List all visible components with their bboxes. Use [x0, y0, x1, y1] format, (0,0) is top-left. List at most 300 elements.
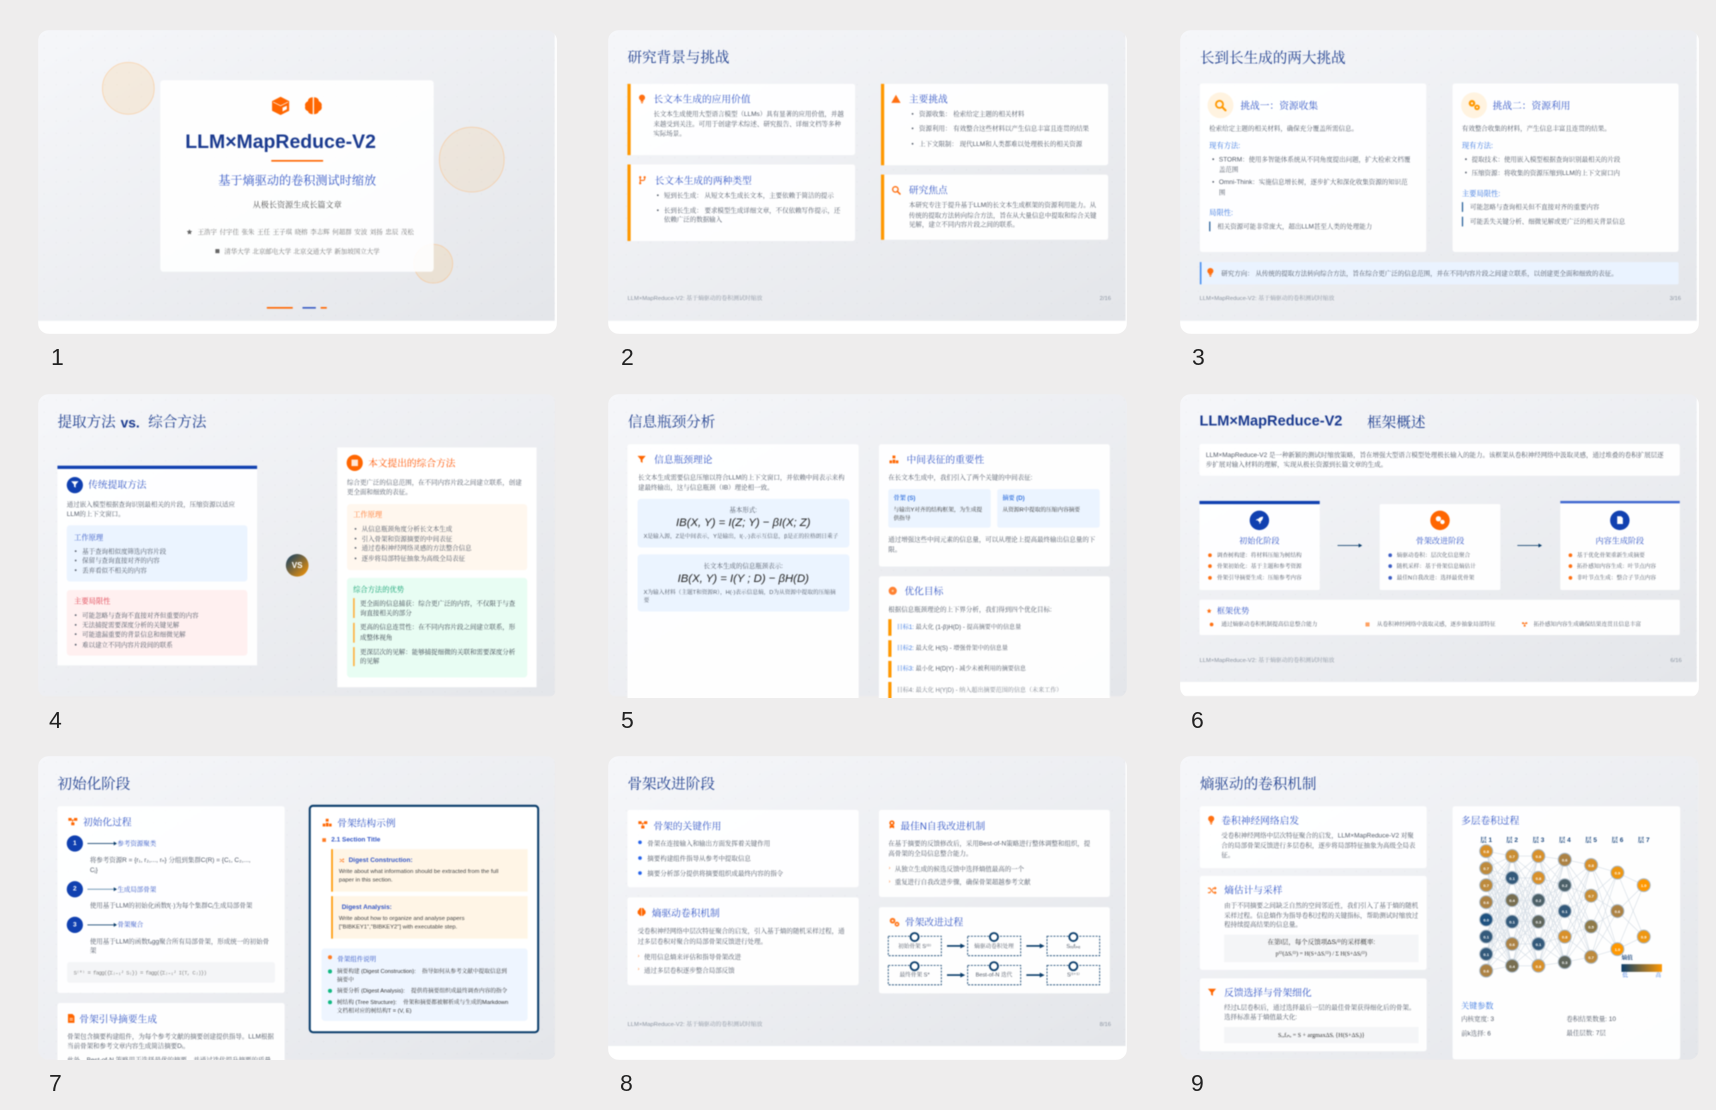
authors: 王浩宇 付宇佳 张朱 王任 王子琪 晓榕 李志辉 何超群 安波 刘扬 忠辰 茂松 — [198, 227, 414, 236]
slide 2: research background — [608, 30, 1127, 334]
box: component legend: 摘要构建 (Digest Construction): 指导如何从参考文献中提取信息到 — [337, 967, 507, 975]
legend: entropy scale — [1620, 953, 1662, 979]
box: skeleton — [888, 489, 991, 528]
box: advantages: 更高的信息连贯性：在不同内容片段之间建立联系，形 — [360, 622, 516, 631]
panel: initialization: 骨架引导摘要生成：压缩参考内容 — [1217, 574, 1302, 582]
decorative dashes — [267, 307, 327, 309]
box: advantages — [347, 578, 527, 678]
panel: intro: LLM×MapReduce-V2 是一种新颖的测试时缩放策略，旨在增强大型语言模型处理极长输入的能力。该框架从卷积神经网络中汲取灵感，通过堆叠的卷积扩展层逐 — [1206, 450, 1664, 459]
box: component legend: 摘要分析 (Digest Analysis): 提供将摘要组织成最终调查内容的指令 — [337, 987, 508, 995]
chart: convolution network: 层 6 — [1611, 835, 1624, 844]
formula box: long text form: IB(X, Y) = I(Y ; D) − βH(D) — [678, 573, 809, 585]
slide 4: extraction vs synthesis — [38, 394, 557, 698]
icon: branch — [639, 176, 646, 184]
panel: challenge one: 相关资源可能非常庞大，超出LLM甚至人类的处理能力 — [1217, 222, 1372, 231]
footer: LLM×MapReduce-V2: 基于熵驱动的卷积测试时缩放 — [627, 1020, 763, 1028]
chart: convolution network: 层 2 — [1506, 835, 1518, 844]
chart: convolution network: 0.4 — [1509, 898, 1516, 903]
chart: convolution network: 0.8 — [1588, 863, 1595, 868]
box: limitations: 难以建立不同内容片段间的联系 — [82, 640, 173, 649]
legend: entropy scale: 熵值 — [1620, 953, 1633, 961]
chart: convolution network — [1480, 835, 1650, 977]
icon: sitemap — [323, 819, 332, 826]
panel: content generation: 拓扑感知内容生成：叶节点内容 — [1577, 562, 1656, 570]
panel: intermediate representations: 限。 — [888, 544, 901, 553]
panel: entropy convolution: 通过多层卷积逐步整合局部反馈 — [644, 966, 735, 975]
panel: digest generation: 骨架包含摘要构建组件，为每个参考文献的摘要创建提供指导。LLM根据 — [67, 1032, 274, 1041]
icon: search — [893, 187, 900, 194]
footer: LLM×MapReduce-V2: 基于熵驱动的卷积测试时缩放 — [627, 294, 763, 302]
panel: two types: 长到长生成： 要求模型生成详细文章，不仅依赖写作提示，还 — [664, 206, 841, 215]
panel: challenge one: 围 — [1219, 187, 1226, 196]
step 1 — [67, 835, 251, 874]
panel: optimization goals: 目标4: 最大化 H(Y|D) - 纳入超出摘要范围的信息（未来工作） — [897, 686, 1062, 694]
chart: convolution network: 0.6 — [1562, 858, 1568, 863]
panel: best-of-N: 高骨架的全局信息整合能力。 — [888, 848, 972, 857]
formula box: basic form: 基本形式: — [729, 505, 757, 514]
panel: digest generation: 骨架引导摘要生成 — [79, 1013, 157, 1026]
step 2 — [67, 881, 253, 909]
page number 5: 5 — [621, 707, 634, 733]
heading: 初始化阶段 — [57, 776, 131, 793]
panel: entropy sampling: 采样过程。信息熵作为指导卷积过程的关键指标，帮助测试时缩放过 — [1224, 910, 1419, 919]
panel: IB theory: 建最终输出，这与信息瓶颈（IB）理论相一致。 — [638, 482, 773, 491]
panel: refinement: 骨架改进阶段 — [1416, 535, 1464, 545]
chart: convolution network: 0.2 — [1536, 898, 1542, 903]
VS badge: VS — [292, 561, 303, 570]
heading — [57, 413, 206, 429]
formula box: long text form: 长文本生成的信息瓶颈表示: — [704, 561, 783, 570]
chart: convolution network: 1.0 — [1641, 883, 1647, 888]
box: limitations: 可能忽略与查询不直接对齐但重要的内容 — [82, 610, 199, 619]
page number 1: 1 — [51, 344, 64, 370]
slide 7: initialization stage — [38, 756, 555, 1068]
panel: digest generation — [57, 1003, 285, 1068]
chart: convolution network: 0.4 — [1509, 964, 1516, 969]
icon: orange circle — [347, 455, 363, 471]
panel: optimization goals: 根据信息瓶颈理论的上下界分析，我们得到四个优化目标: — [888, 605, 1052, 614]
panel: intro — [1199, 444, 1680, 476]
step 1: 参考资源聚类 — [117, 838, 157, 847]
panel: best-of-N — [879, 810, 1110, 897]
panel: optimization goals: 优化目标 — [904, 584, 944, 597]
page number 6: 6 — [1191, 707, 1204, 733]
box: advantages: 综合方法的优势 — [353, 585, 404, 594]
panel: two types — [627, 164, 855, 241]
footer: 3/16 — [1670, 296, 1681, 302]
panel: CNN inspiration — [1200, 806, 1427, 868]
panel: challenge one: 检索给定主题的相关材料，确保充分覆盖所需信息。 — [1209, 124, 1358, 133]
icon: shuffle — [1208, 887, 1216, 894]
chart: convolution network: 层 7 — [1638, 835, 1650, 844]
icon: target — [889, 587, 897, 595]
panel: challenge two: 可能丢失关键分析、细微见解或更广泛的相关背景信息 — [1470, 216, 1626, 225]
panel: skeleton role: 骨架的关键作用 — [653, 819, 721, 832]
heading: LLM×MapReduce-V2 — [1199, 414, 1342, 430]
step 3: 使用基于LLM的函数fₐgg聚合所有局部骨架，形成统一的初始骨 — [90, 936, 270, 945]
chart: convolution network: 0.7 — [1483, 883, 1490, 888]
box: advantages: 更深层次的见解：能够捕捉细微的关联和需要深度分析 — [360, 647, 516, 656]
panel: feedback selection — [1200, 978, 1427, 1051]
panel: best-of-N: › — [889, 879, 891, 885]
chart: convolution network: 0.1 — [1509, 920, 1516, 925]
box: principle: 工作原理 — [353, 510, 383, 519]
panel: research focus: 传统的提取方法转向综合方法，旨在从大量信息中提取和综合关键 — [909, 210, 1097, 219]
panel: feedback selection: 选择标准基于熵值最大化: — [1224, 1012, 1297, 1021]
icon: search circle — [1208, 92, 1233, 118]
panel: entropy convolution — [627, 897, 859, 985]
panel: main challenges: 主要挑战 — [909, 93, 948, 106]
key parameters: 卷积结果数量: 10 — [1566, 1014, 1616, 1023]
icon: warning — [891, 95, 901, 103]
box: principle: 逐步将局部特征抽象为高级全局表征 — [362, 554, 466, 563]
chart: convolution network: 0.6 — [1615, 909, 1621, 914]
panel: intermediate representations: 在长文本生成中，我们引入了两个关键的中间表征: — [888, 473, 1033, 482]
panel: entropy convolution: › — [638, 954, 640, 960]
box: digest: 摘要 (D) — [1002, 494, 1025, 502]
box: component legend: 摘要中 — [337, 976, 354, 984]
panel: intermediate representations: 通过增强这些中间元素的信息量，可以从理论上提高最终输出信息量的下 — [888, 534, 1096, 543]
panel: proposed synthesis — [337, 447, 537, 687]
legend: entropy scale: 高 — [1655, 971, 1661, 979]
panel: research focus: 见解，建立不同内容片段之间的联系。 — [909, 220, 1019, 229]
chart: convolution network: 0.1 — [1483, 952, 1490, 957]
panel: initialization process — [57, 806, 285, 993]
panel: advantages: 从卷积神经网络中汲取灵感，逐步抽象局部特征 — [1377, 620, 1496, 628]
box: working principle: 工作原理 — [74, 533, 104, 542]
icon: bulb — [639, 95, 645, 103]
panel: refinement: 随机采样：基于骨架信息熵估计 — [1397, 562, 1476, 570]
formula box — [1224, 935, 1419, 962]
chart: convolution network: 0.5 — [1588, 924, 1595, 929]
panel: entropy convolution: 熵驱动卷积机制 — [652, 906, 720, 919]
footer: 6/16 — [1670, 658, 1682, 664]
box: principle: 引入骨架和资源摘要的中间表征 — [362, 534, 453, 543]
panel: refinement — [1380, 504, 1500, 590]
chart: convolution network: 0.1 — [1562, 909, 1568, 914]
box: working principle: 丢弃看似不相关的内容 — [82, 565, 147, 574]
panel: proposed synthesis: 综合更广泛的信息范围，在不同内容片段之间建立联系，创建 — [347, 478, 522, 487]
panel: refinement process diagram: Best-of-N 迭代 — [976, 970, 1013, 978]
box: component legend: 骨架组件说明 — [337, 954, 377, 963]
panel: intermediate representations: 中间表征的重要性 — [906, 453, 985, 466]
panel: entropy sampling: 程持续提高结果的信息量。 — [1224, 919, 1302, 928]
affiliations: 清华大学 北京邮电大学 北京交通大学 新加坡国立大学 — [224, 246, 380, 255]
panel: advantages: 拓扑感知内容生成确保结果连贯且信息丰富 — [1534, 620, 1641, 628]
panel: challenge one: 挑战一：资源收集 — [1240, 99, 1318, 112]
formula box — [1224, 1027, 1419, 1043]
panel: refinement process diagram: 骨架改进过程 — [905, 916, 963, 929]
chart: convolution network: 层 5 — [1585, 835, 1597, 844]
formula box — [67, 962, 275, 983]
box: digest: 从资源R中提取的压缩内容摘要 — [1002, 506, 1080, 514]
panel: entropy convolution: 过多层卷积对聚合的局部骨架反馈进行处理。 — [638, 936, 767, 945]
box: skeleton: 供指导 — [894, 514, 911, 522]
chart: convolution network: 1.0 — [1615, 947, 1621, 952]
panel: best-of-N: 从独立生成的候选反馈中选择熵值最高的一个 — [895, 864, 1025, 873]
panel: IB theory — [627, 444, 859, 703]
arrow — [1338, 543, 1362, 547]
main title: LLM×MapReduce-V2 — [185, 131, 376, 153]
box: principle: 从信息瓶颈角度分析长文本生成 — [362, 524, 453, 533]
icon: nodes — [68, 818, 77, 825]
chart: convolution network: 0.1 — [1483, 935, 1490, 940]
panel: traditional extraction: 传统提取方法 — [88, 478, 147, 491]
step 2: 生成局部骨架 — [117, 885, 157, 894]
formula box: 在第l层，每个反馈项ΔSᵢ⁽ˡ⁾的采样概率: — [1268, 937, 1375, 946]
step 1: 将参考资源R = {r₁, r₂,..., rₙ} 分组到集群C(R) = {C₁, C₂,..., — [90, 855, 251, 864]
footer — [627, 1020, 1111, 1028]
panel: CNN inspiration: 卷积神经网络启发 — [1221, 814, 1299, 827]
panel: content generation: 基于优化骨架重新生成摘要 — [1577, 551, 1645, 559]
footer: LLM×MapReduce-V2: 基于熵驱动的卷积测试时缩放 — [1199, 656, 1335, 664]
box: digest analysis — [331, 896, 528, 939]
footer — [1199, 294, 1682, 302]
box: advantages: 成整体视角 — [360, 632, 392, 641]
heading: 综合方法 — [148, 414, 207, 431]
footer — [1199, 656, 1682, 664]
panel: initialization: 调查树构建：将材料压缩为树结构 — [1217, 551, 1302, 559]
box: advantages: 更全面的信息捕获：综合更广泛的内容，不仅限于与查 — [360, 599, 516, 608]
panel: best-of-N: › — [889, 865, 891, 871]
key parameters — [1461, 1001, 1616, 1038]
callout: research direction: 研究方向： 从传统的提取方法转向综合方法，旨在综合更广泛的信息范围，并在不同内容片段之间建立联系，以创建更全面和细致的表征。 — [1221, 268, 1618, 277]
panel: initialization: 骨架初始化：基于主题和参考资源 — [1217, 562, 1302, 570]
heading: vs. — [121, 415, 140, 430]
heading: 研究背景与挑战 — [627, 48, 730, 66]
formula box: basic form: IB(X, Y) = I(Z; Y) − βI(X; Z) — [676, 517, 811, 529]
box: limitations: 主要局限性 — [74, 597, 111, 606]
panel: content generation — [1560, 501, 1680, 590]
panel: main challenges — [881, 84, 1108, 165]
panel: proposed synthesis: 本文提出的综合方法 — [368, 457, 456, 470]
panel: proposed synthesis: 更全面和细致的表征。 — [347, 487, 412, 496]
panel: application value: 长文本生成的应用价值 — [653, 93, 751, 106]
panel: refinement process diagram — [879, 907, 1110, 993]
page number 4: 4 — [49, 707, 62, 733]
step 2: 使用基于LLM的初始化函数f(·)为每个集群Cⱼ生成局部骨架 — [90, 900, 253, 909]
panel: challenge one: 盖范围 — [1219, 165, 1239, 174]
icon: gears — [1430, 511, 1450, 530]
step 3: 3 — [73, 921, 77, 928]
box: limitations: 可能遗漏重要的背景信息和细微见解 — [82, 629, 186, 638]
panel: optimization goals: 目标2: 最大化 H(S) - 增强骨架中的信息量 — [897, 644, 1008, 652]
panel: initialization — [1199, 501, 1320, 590]
title card — [160, 80, 434, 272]
tagline: 从极长资源生成长篇文章 — [253, 200, 342, 210]
chart: convolution network: 0.7 — [1588, 894, 1595, 899]
panel: entropy convolution: › — [638, 967, 640, 973]
icon: funnel circle — [67, 477, 83, 493]
panel: entropy convolution: 使用信息熵来评估和指导骨架改进 — [644, 952, 742, 961]
box: digest construction: paper in this section. — [339, 878, 393, 884]
panel: skeleton example — [310, 806, 538, 1032]
panel: entropy sampling: 由于不同摘要之间缺乏自然的空间邻近性，我们引入了基于熵的随机 — [1224, 900, 1419, 909]
formula box: S⁽⁰⁾ = fagg({Σⱼ₌₁ᴶ Sⱼ}) = fagg({Σⱼ₌₁ᴶ I(T, Cⱼ)}) — [74, 969, 207, 976]
panel: research focus — [881, 175, 1108, 240]
chart: convolution network: 0.3 — [1536, 920, 1542, 925]
box: digest construction — [331, 849, 528, 892]
heading: 信息瓶颈分析 — [628, 414, 716, 431]
box: principle — [347, 504, 527, 570]
step 1: Cⱼ} — [90, 867, 99, 874]
icon: cube — [272, 97, 289, 115]
footer: 8/16 — [1100, 1022, 1111, 1028]
panel: main challenges: 上下文限制： 现代LLM和人类都难以处理极长的相关资源 — [919, 139, 1083, 148]
slide 8: skeleton refinement — [608, 756, 1127, 1060]
icon: gears — [890, 918, 899, 927]
panel: skeleton role: 摘要分析部分提供将摘要组织成最终内容的指令 — [647, 868, 784, 877]
step 1: 1 — [73, 840, 77, 847]
panel: challenge two — [1453, 83, 1679, 252]
panel: entropy sampling — [1200, 876, 1427, 970]
formula box: Sᵣₑfᵢₙₑ = S + argmaxΔSᵢ {H(S+ΔSᵢ)} — [1278, 1032, 1365, 1039]
box: advantages: 的见解 — [360, 656, 380, 665]
panel: feedback selection: 经过L层卷积后，通过选择最后一层的最佳骨架获得细化后的骨架。 — [1224, 1002, 1415, 1011]
panel: application value: 长文本生成使用大型语言模型（LLMs）具有显著的应用价值，并越 — [653, 109, 844, 118]
formula box: basic form — [638, 499, 849, 547]
panel: CNN inspiration: 受卷积神经网络中层次特征聚合的启发，LLM×MapReduce-V2 对聚 — [1221, 831, 1414, 840]
heading — [1199, 413, 1426, 431]
panel: challenge two: 压缩资源：将收集的资源压缩到LLM的上下文窗口内 — [1472, 168, 1621, 177]
panel: optimization goals — [879, 576, 1110, 706]
panel: two types: 依赖广泛的数据输入 — [664, 214, 723, 223]
panel: traditional extraction: LLM的上下文窗口。 — [67, 509, 125, 518]
chart: convolution network: 0.7 — [1588, 955, 1595, 960]
panel: digest generation: 此外，Best-of-N 策略用于选择最优的摘要，并通过迭代提升摘要的质量。 — [67, 1055, 277, 1064]
key parameters: 内核宽度: 3 — [1461, 1014, 1495, 1023]
panel: skeleton role: 摘要构建组件指导从参考中提取信息 — [647, 853, 751, 862]
slide 3: two challenges — [1180, 30, 1699, 334]
chart: convolution network: 0.9 — [1615, 871, 1621, 876]
heading: 提取方法 — [57, 413, 116, 431]
panel: application value — [627, 84, 855, 155]
panel: IB theory: 信息瓶颈理论 — [654, 453, 713, 466]
panel: research focus: 研究焦点 — [909, 184, 948, 197]
heading: 骨架改进阶段 — [627, 775, 715, 793]
panel: main challenges: 资源利用： 有效整合这些材料以产生信息丰富且连贯的结果 — [919, 124, 1090, 133]
panel: CNN inspiration: 征。 — [1221, 850, 1234, 859]
footer: LLM×MapReduce-V2: 基于熵驱动的卷积测试时缩放 — [1199, 294, 1335, 302]
panel: multilayer convolution — [1453, 806, 1680, 1059]
chart: convolution network: 0.8 — [1536, 964, 1542, 969]
panel: challenge two: 有效整合收集的材料，产生信息丰富且连贯的结果。 — [1462, 124, 1611, 133]
box: limitations: 无法捕捉需要深度分析的关键见解 — [82, 620, 180, 629]
box: digest construction: Digest Construction: — [349, 857, 413, 864]
page number 8: 8 — [620, 1070, 633, 1096]
box: digest — [997, 489, 1100, 528]
box: limitations — [67, 590, 247, 656]
key parameters: 最佳层数: 7层 — [1566, 1028, 1606, 1037]
chart: convolution network: 0.6 — [1483, 969, 1490, 974]
box: working principle: 保留与查询直接对齐的内容 — [82, 556, 160, 565]
flow row 1 — [888, 936, 1100, 985]
panel: digest generation: 当前骨架和参考文章内容生成简洁摘要Dᵢ。 — [67, 1041, 189, 1050]
panel: challenge one: 局限性: — [1209, 208, 1233, 217]
panel: CNN inspiration: 合的局部骨架反馈进行多层卷积，逐步将局部特征抽象为高级全局表 — [1221, 840, 1416, 849]
page number 9: 9 — [1191, 1070, 1204, 1096]
chart: convolution network: 0.8 — [1483, 849, 1490, 854]
panel: challenge two: 现有方法: — [1462, 141, 1493, 150]
box: skeleton: 骨架 (S) — [894, 494, 915, 502]
panel: skeleton example: 骨架结构示例 — [337, 816, 396, 829]
chart: convolution network: 0.8 — [1536, 854, 1542, 859]
panel: multilayer convolution: 多层卷积过程 — [1461, 814, 1520, 827]
callout: research direction — [1200, 262, 1679, 284]
panel: challenge one: 现有方法: — [1209, 141, 1240, 150]
subtitle: 基于熵驱动的卷积测试时缩放 — [218, 172, 376, 187]
legend: entropy scale: 低 — [1622, 971, 1628, 979]
panel: application value: 实际场景。 — [653, 129, 686, 138]
chart: convolution network: 层 3 — [1532, 835, 1545, 844]
chart: convolution network: 0.2 — [1562, 883, 1568, 888]
chart: convolution network: 0.8 — [1562, 935, 1568, 940]
icon: sitemap — [889, 456, 898, 463]
arrow — [1517, 543, 1542, 547]
panel: research focus: 本研究专注于提升基于LLM的长文本生成框架的资源利用能力。从 — [909, 200, 1097, 209]
panel: challenge two: 可能忽略与查询相关但不直接对齐的重要内容 — [1470, 202, 1600, 211]
panel: feedback selection: 反馈选择与骨架细化 — [1224, 986, 1312, 999]
chart: convolution network: 0.1 — [1509, 876, 1516, 881]
icon: nodes — [638, 821, 647, 828]
step 2: 2 — [73, 886, 77, 893]
panel: refinement process diagram: S⁽ᵗ⁺¹⁾ — [1067, 971, 1080, 978]
footer — [627, 294, 1112, 302]
slide 9: entropy-driven convolution — [1180, 756, 1698, 1060]
page number 2: 2 — [621, 344, 634, 370]
panel: optimization goals: 目标3: 最小化 H(D|Y) - 减少未被利用的摘要信息 — [897, 665, 1027, 673]
formula box: long text form — [638, 554, 849, 611]
panel: best-of-N: 最佳N自我改进机制 — [900, 819, 985, 832]
page number 3: 3 — [1192, 344, 1205, 370]
panel: intro: 步扩展对输入材料的理解，实现从极长资源到长篇文章的生成。 — [1206, 460, 1387, 469]
panel: challenge one: STORM：使用多智能体系统从不同角度提出问题，扩大检索文档覆 — [1219, 154, 1411, 163]
panel: skeleton example: 2.1 Section Title — [331, 837, 381, 844]
heading: 长到长生成的两大挑战 — [1200, 50, 1346, 67]
heading: 熵驱动的卷积机制 — [1200, 776, 1316, 793]
panel: traditional extraction — [57, 466, 257, 665]
chart: convolution network: 0.9 — [1641, 935, 1647, 940]
icon: document — [68, 1014, 74, 1023]
chart: convolution network: 层 1 — [1480, 835, 1493, 844]
box: component legend — [322, 948, 528, 1021]
panel: advantages: 框架优势 — [1217, 606, 1249, 616]
icon: brain — [305, 97, 322, 114]
key parameters: 关键参数 — [1461, 1001, 1493, 1011]
icon: bulb — [1208, 816, 1214, 824]
box: skeleton: 与输出Y对齐的结构框架，为生成提 — [894, 506, 982, 514]
slide 6: framework overview — [1180, 394, 1699, 696]
panel: skeleton role — [627, 810, 859, 887]
chart: convolution network: 0.7 — [1483, 866, 1490, 871]
panel: skeleton role: 骨架在连接输入和输出方面发挥着关键作用 — [647, 838, 770, 847]
panel: IB theory: 长文本生成需要信息压缩以符合LLM的上下文窗口，并依赖中间表示来构 — [638, 473, 845, 482]
icon: document — [1610, 511, 1630, 530]
step 3: 架 — [90, 945, 97, 954]
box: digest analysis: Digest Analysis: — [342, 904, 392, 911]
panel: best-of-N: 在基于摘要的反馈修改后，采用Best-of-N策略进行整体调整和组织，提 — [888, 838, 1091, 847]
panel: two types: 长文本生成的两种类型 — [655, 174, 752, 187]
icon: brain — [638, 908, 646, 916]
panel: refinement: 最佳N自我改进：选择最优骨架 — [1397, 574, 1475, 582]
icon: funnel — [1208, 989, 1216, 996]
panel: initialization process: 初始化过程 — [83, 815, 132, 828]
box: working principle: 基于查询相似度筛选内容片段 — [82, 546, 167, 555]
VS badge — [286, 554, 309, 577]
panel: refinement process diagram: 熵驱动卷积处理 — [974, 942, 1014, 950]
panel: entropy sampling: 熵估计与采样 — [1224, 883, 1283, 896]
key parameters: 前k选择: 6 — [1461, 1029, 1491, 1038]
